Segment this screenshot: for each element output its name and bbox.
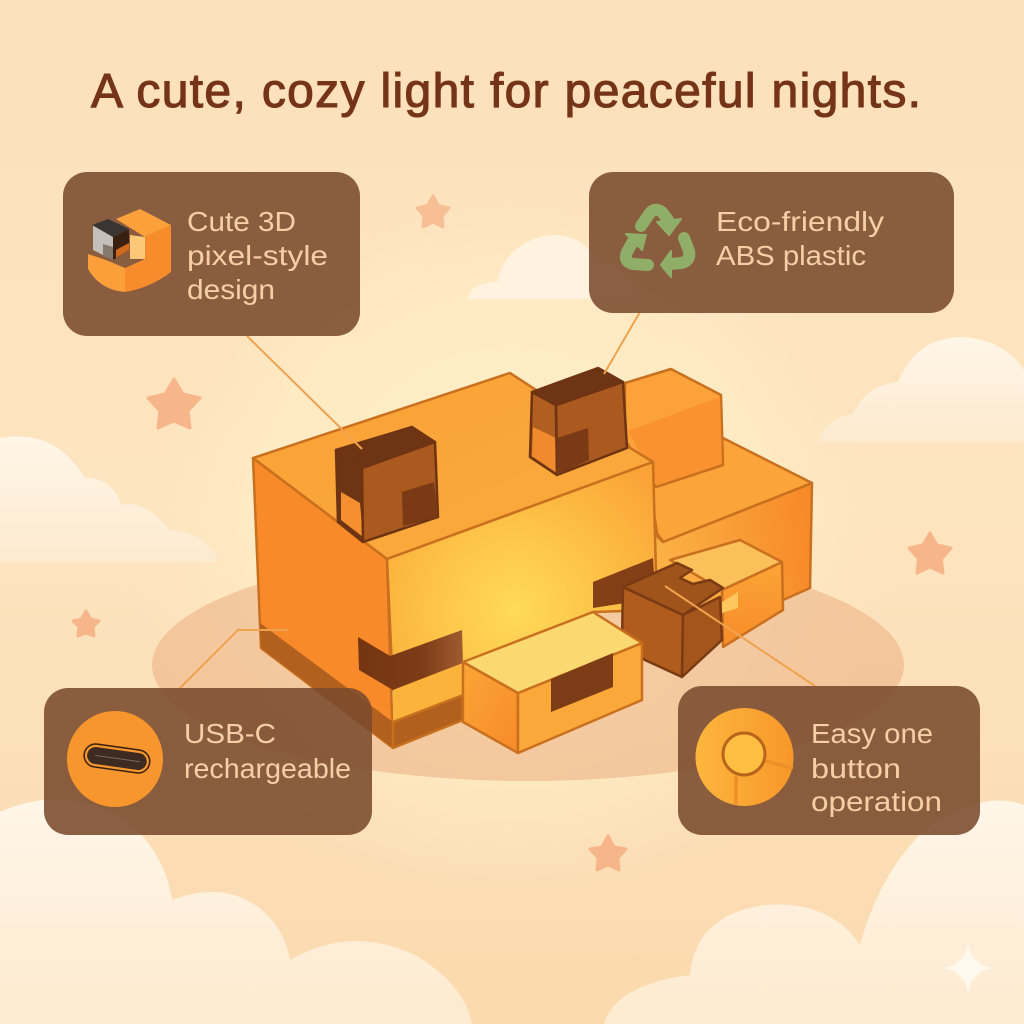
pointer: usb — [178, 630, 288, 690]
text: button: button — [811, 753, 901, 784]
panel: button — [678, 686, 980, 835]
left side dark band — [260, 623, 393, 748]
ground shadow — [152, 549, 904, 781]
star: lower left — [73, 611, 99, 636]
text: design: pixel-style — [187, 240, 328, 271]
title: A cute, cozy light for peaceful nights. — [91, 65, 921, 118]
pointer lines — [178, 312, 815, 690]
text: button: Easy one — [811, 718, 933, 749]
cloud: upper middle — [467, 235, 640, 299]
text: plastic: Eco-friendly — [716, 206, 884, 237]
rear body block — [645, 438, 812, 640]
cloud: bottom right — [604, 800, 1024, 1024]
star: upper left — [148, 379, 200, 428]
text: button: operation — [811, 786, 942, 817]
snout — [463, 612, 642, 753]
pointer: button — [665, 586, 815, 686]
cloud: bottom left — [0, 799, 472, 1024]
text: usb — [184, 718, 351, 784]
sparkle — [944, 944, 992, 992]
text: usb: rechargeable — [184, 753, 351, 784]
icon: usb-c — [67, 711, 163, 807]
glow halo — [132, 160, 892, 920]
right eye dark stripe — [593, 558, 655, 608]
text: design: design — [187, 274, 275, 305]
right paw — [670, 540, 783, 647]
text: plastic — [716, 206, 884, 271]
panel: plastic — [589, 172, 954, 313]
head left side — [253, 458, 393, 748]
text: plastic: ABS plastic — [716, 240, 866, 271]
pointer: plastic — [604, 312, 640, 374]
head top — [253, 373, 653, 559]
left ear — [336, 427, 438, 542]
pointer: design — [247, 336, 362, 449]
mouth brown band — [393, 695, 463, 748]
star: right — [909, 533, 951, 573]
mouth yellow band — [393, 663, 463, 722]
icon: recycle — [626, 210, 689, 277]
head front — [387, 462, 657, 700]
text: design — [187, 206, 328, 305]
tail block — [625, 369, 723, 487]
right ear — [530, 368, 627, 475]
cloud: left — [0, 436, 220, 562]
cloud: upper right — [818, 337, 1024, 442]
panel: design — [63, 172, 360, 336]
text: usb: USB-C — [184, 718, 276, 749]
icon: pixel fox — [88, 209, 171, 292]
star: bottom — [590, 836, 626, 870]
mouth dark stripe — [358, 630, 463, 690]
text: button — [811, 718, 942, 817]
nose block — [622, 563, 723, 677]
fox lamp — [253, 368, 812, 753]
icon: button — [696, 708, 794, 806]
text: design: Cute 3D — [187, 206, 296, 237]
star: top centre — [417, 196, 449, 227]
panel: usb — [44, 688, 372, 835]
